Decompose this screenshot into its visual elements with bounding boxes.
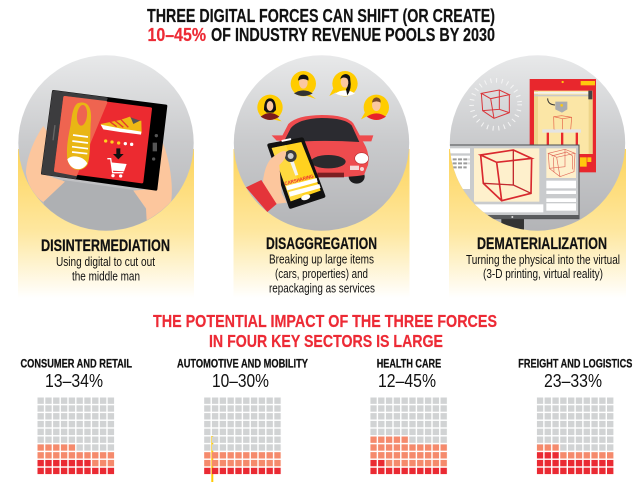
sector: consumer and retail (20, 358, 132, 476)
title: THREE DIGITAL FORCES CAN SHIFT (OR CREATE) (147, 6, 495, 26)
subheading: IN FOUR KEY SECTORS IS LARGE (209, 331, 443, 351)
waffle chart: 13–34% (38, 398, 115, 476)
panel: dematerialization (448, 55, 626, 298)
icon: shoe top view (67, 102, 91, 170)
sector: health care (370, 358, 448, 476)
heading: DISINTERMEDIATION (41, 236, 170, 255)
icon: 3-D printer (530, 79, 596, 172)
description: (cars, properties) and (275, 267, 368, 281)
waffle chart: 23–33% (537, 398, 614, 476)
description: the middle man (72, 270, 140, 284)
icon: hand (263, 151, 287, 204)
sector: automotive and mobility: 10–30% (212, 370, 269, 391)
sector: freight and logistics: 23–33% (544, 370, 602, 391)
icon: avatar woman ponytail (329, 71, 358, 96)
subheading (153, 311, 497, 351)
title: OF INDUSTRY REVENUE POOLS BY 2030 (211, 25, 495, 45)
panel: disintermediation (18, 55, 194, 298)
description: repackaging as services (269, 282, 375, 296)
title: 10–45% (148, 25, 206, 45)
sector: automotive and mobility (177, 358, 308, 482)
icon: avatar woman (257, 95, 283, 121)
icon: shoe side view (101, 117, 142, 135)
icon: arrow and cart (107, 148, 127, 178)
description (56, 255, 155, 284)
sector: consumer and retail: CONSUMER AND RETAIL (20, 358, 132, 370)
icon: monitor with 3-D model (448, 145, 579, 233)
waffle chart: 10–30% (204, 398, 282, 476)
heading: DISAGGREGATION (266, 234, 377, 253)
icon: phone with carsharing app (269, 138, 323, 207)
title (147, 6, 495, 45)
icon: glowing wire cube (472, 80, 520, 128)
icon: red sleeve (246, 180, 277, 212)
panel: disaggregation (234, 55, 410, 298)
description (466, 253, 620, 281)
description (269, 252, 375, 296)
icon: star rating (104, 139, 133, 146)
icon: avatar man dark (291, 71, 316, 99)
subheading: THE POTENTIAL IMPACT OF THE THREE FORCES (153, 311, 497, 331)
icon: hands holding tablet (26, 91, 172, 233)
description: Breaking up large items (269, 252, 374, 266)
sector: automotive and mobility: AUTOMOTIVE AND MOBILITY (177, 358, 308, 370)
description: Using digital to cut out (56, 255, 155, 269)
icon: red car (272, 115, 373, 184)
waffle chart: 12–45% (370, 398, 448, 476)
icon: phone with carsharing app: CARSHARING (284, 174, 315, 187)
sector: consumer and retail: 13–34% (45, 370, 103, 391)
description: (3-D printing, virtual reality) (483, 267, 603, 281)
sector: health care: HEALTH CARE (377, 358, 441, 370)
icon: avatar man red (361, 95, 389, 120)
sector: health care: 12–45% (378, 370, 436, 391)
sector: freight and logistics (518, 358, 633, 476)
